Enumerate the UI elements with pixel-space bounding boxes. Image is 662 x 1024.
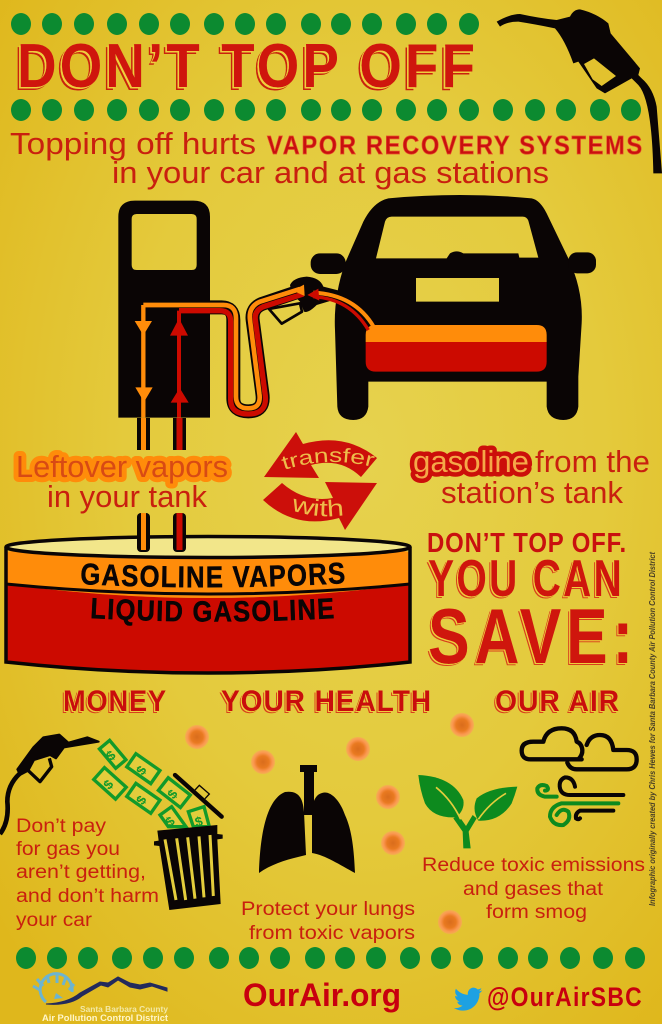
- health text: Protect your lungs: [241, 899, 415, 920]
- air text: Reduce toxic emissions: [422, 855, 645, 876]
- don't top off heading: DON’T TOP OFF.: [427, 527, 627, 558]
- benefit headings: YOUR HEALTH: [221, 685, 432, 718]
- vapor particles: [185, 713, 474, 934]
- benefit headings: OUR AIR: [495, 685, 620, 718]
- car: [311, 195, 596, 420]
- air text: and gases that: [463, 879, 604, 900]
- dollar signs: $: [162, 813, 178, 830]
- icon: twitter bird: [454, 988, 482, 1011]
- bottom dot row: [16, 947, 645, 969]
- icon: dollar bills: [94, 740, 209, 827]
- benefit headings: MONEY: [63, 685, 167, 718]
- logo: Santa Barbara County APCD: [33, 974, 169, 1023]
- gasoline from the station's tank text: [413, 444, 650, 510]
- money text: Don’t pay: [16, 816, 107, 837]
- icon: trash can: [154, 775, 223, 910]
- money text: aren’t getting,: [16, 862, 146, 883]
- money text: for gas you: [16, 839, 120, 860]
- second dot row: [11, 99, 641, 121]
- air text: form smog: [486, 902, 587, 923]
- subtitle: [10, 126, 644, 190]
- nozzle: [269, 277, 370, 324]
- icon: clouds: [522, 728, 637, 769]
- hose outline: [210, 290, 303, 411]
- dollar signs: $: [100, 776, 117, 792]
- fuel lines: [143, 289, 374, 418]
- gasoline from the station's tank text: gasoline: [413, 444, 529, 479]
- dollar signs: [100, 747, 205, 830]
- logo: Santa Barbara County APCD: Santa Barbara County: [80, 1005, 169, 1014]
- transfer arrows: [263, 432, 377, 530]
- icon: leaves: [418, 775, 517, 848]
- icon: fuel nozzle top right: [497, 9, 662, 173]
- air text: [422, 855, 645, 923]
- air section icons: [418, 728, 637, 848]
- icon: lungs: [259, 765, 355, 873]
- arrowheads: [135, 285, 319, 403]
- dollar signs: $: [193, 813, 205, 830]
- car fuel tank: [366, 325, 547, 372]
- dollar signs: $: [133, 763, 150, 778]
- icon: nozzle: [0, 735, 99, 834]
- dollar signs: $: [133, 792, 150, 807]
- leftover vapors text: in your tank: [47, 479, 207, 514]
- gas pump diagram: [118, 195, 596, 420]
- dollar signs: $: [103, 747, 119, 764]
- gasoline from the station's tank text: station’s tank: [441, 475, 623, 510]
- money text: [16, 816, 159, 931]
- subtitle: Topping off hurts: [10, 126, 256, 161]
- icon: wind: [537, 777, 623, 825]
- website: OurAir.org: [243, 977, 401, 1013]
- gasoline from the station's tank text: from the: [535, 444, 650, 479]
- pump body: [118, 201, 210, 418]
- pipes below pump: [137, 418, 186, 450]
- money section illustration: [0, 735, 223, 910]
- benefit headings: [63, 685, 620, 718]
- transfer arrows: transfer: [281, 448, 375, 469]
- leftover vapors text: Leftover vapors: [16, 449, 228, 484]
- transfer arrows: with: [294, 498, 342, 516]
- leftover vapors text: [16, 449, 228, 514]
- logo: Santa Barbara County APCD: Air Pollution Control District: [42, 1013, 168, 1023]
- title: DON’T TOP OFF: [17, 32, 478, 101]
- money text: your car: [16, 910, 93, 931]
- dollar signs: $: [164, 786, 181, 802]
- vertical credit: Infographic originally created by Chris Hewes for Santa Barbara County Air Pollution Control District: [647, 551, 657, 906]
- money text: and don’t harm: [16, 886, 159, 907]
- tank label: vapors: GASOLINE VAPORS: [81, 562, 344, 588]
- health text: [241, 899, 415, 944]
- tank label: liquid: LIQUID GASOLINE: [92, 598, 334, 626]
- health text: from toxic vapors: [249, 923, 415, 944]
- station fuel tank: [4, 513, 412, 675]
- top dot row: [11, 13, 479, 35]
- subtitle: in your car and at gas stations: [112, 155, 549, 190]
